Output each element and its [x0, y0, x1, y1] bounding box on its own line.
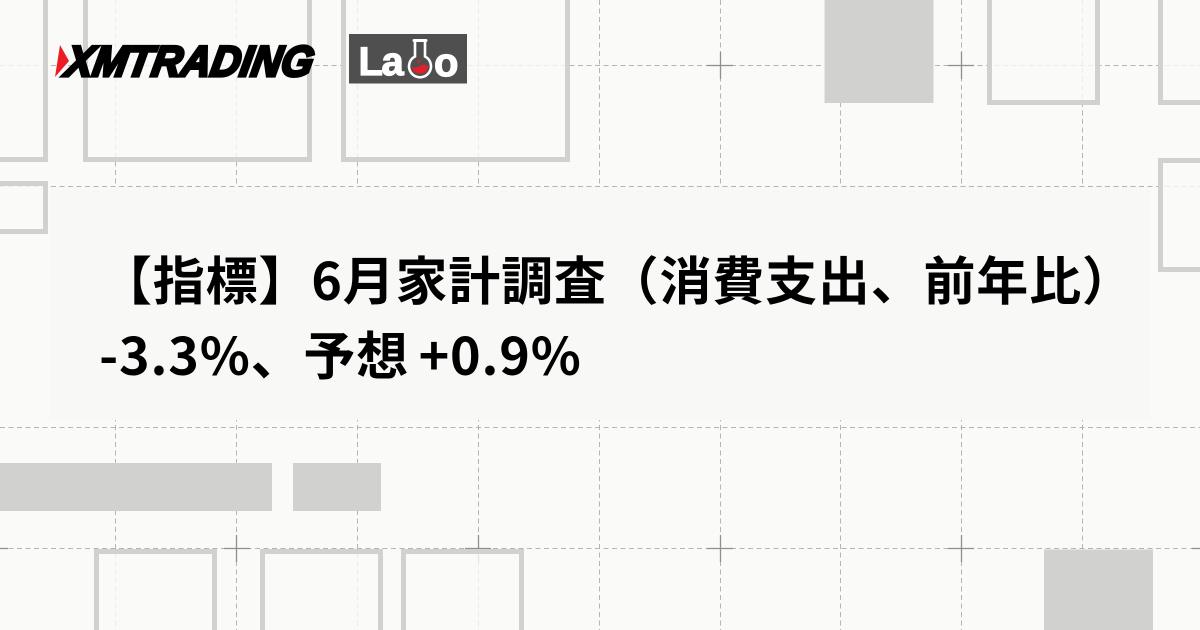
title [99, 240, 1135, 390]
wordmark letters: a [382, 40, 404, 84]
wordmark letters: L [358, 40, 383, 84]
icon: red triangle [55, 45, 69, 77]
wordmark letters: o [434, 41, 458, 84]
center panel [50, 187, 1150, 420]
title: -3.3%、予想 +0.9% [99, 315, 582, 390]
logo: XMTRADING [55, 38, 318, 84]
icon: flask [409, 39, 431, 77]
wordmark letters [358, 40, 458, 85]
title: 【指標】6月家計調査（消費支出、前年比） [100, 240, 1135, 315]
logo: Lab [349, 34, 467, 84]
